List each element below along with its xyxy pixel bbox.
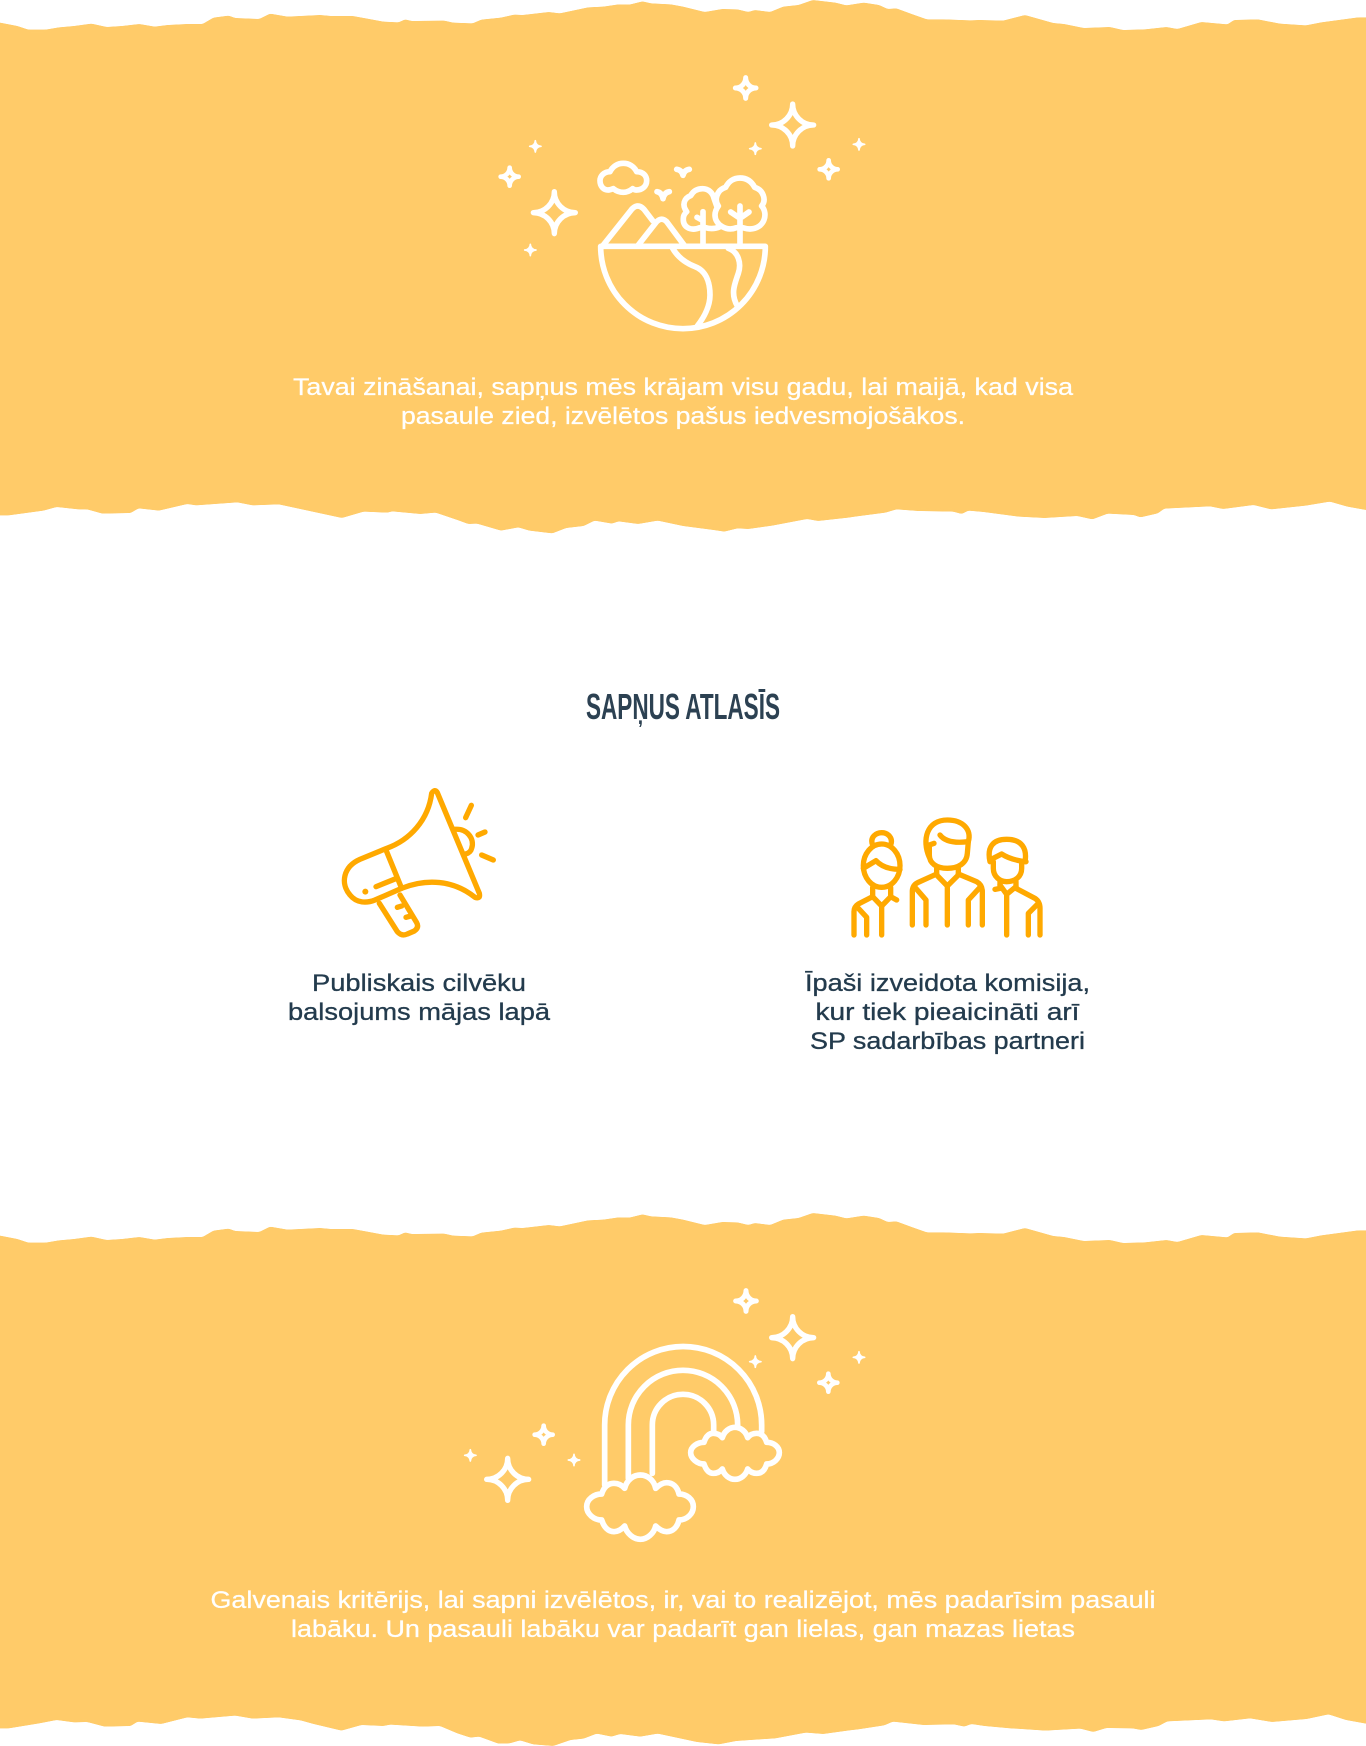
- text block: intro: pasaule zied, izvēlētos pašus iedvesmojošākos.: [401, 403, 965, 430]
- icon: megaphone: [344, 791, 493, 935]
- text block: intro: [293, 374, 1074, 430]
- panel: bottom yellow torn-paper band: [0, 1213, 1366, 1746]
- text block: commission: SP sadarbības partneri: [810, 1028, 1085, 1055]
- icon: rainbow with clouds and sparkles: [465, 1291, 865, 1539]
- text block: public vote: Publiskais cilvēku: [312, 970, 526, 997]
- icon: rainbow arcs and clouds: [587, 1346, 779, 1539]
- icon: sparkles around rainbow: [465, 1291, 865, 1500]
- icon: three people committee: [854, 820, 1040, 935]
- text block: main criterion: labāku. Un pasauli labāku var padarīt gan lielas, gan mazas lietas: [291, 1616, 1075, 1643]
- icon: woman: [854, 833, 900, 935]
- text block: commission: Īpaši izveidota komisija,: [805, 970, 1090, 997]
- text block: commission: [805, 970, 1090, 1055]
- text block: main criterion: [210, 1587, 1156, 1643]
- text block: commission: kur tiek pieaicināti arī: [816, 999, 1080, 1026]
- heading: SAPŅUS ATLASĪS: [586, 686, 780, 727]
- icon: center man: [912, 820, 982, 925]
- text block: public vote: [288, 970, 551, 1026]
- text block: main criterion: Galvenais kritērijs, lai sapni izvēlētos, ir, vai to realizējot, mēs padarīsim pasauli: [210, 1587, 1156, 1614]
- icon: globe bowl, rivers and scenery: [600, 163, 765, 329]
- icon: half globe with mountains, trees and sparkles: [501, 78, 865, 329]
- text block: intro: Tavai zināšanai, sapņus mēs krājam visu gadu, lai maijā, kad visa: [293, 374, 1074, 401]
- text block: public vote: balsojums mājas lapā: [288, 999, 551, 1026]
- icon: right man: [989, 839, 1040, 935]
- panel: top yellow torn-paper band: [0, 0, 1366, 533]
- icon: sparkles around globe: [501, 78, 865, 256]
